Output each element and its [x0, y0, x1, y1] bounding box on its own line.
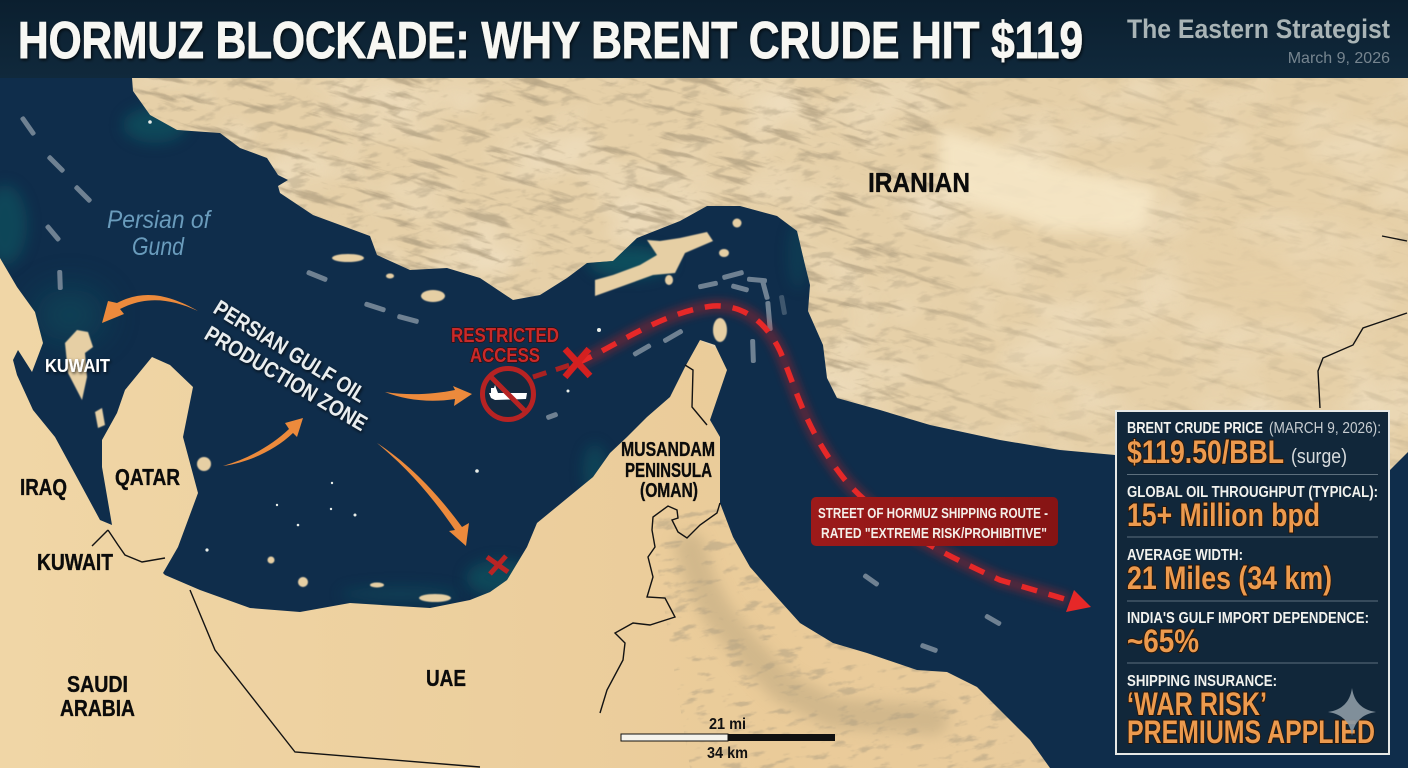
stat: global oil throughput: 15+ Million bpd [1127, 497, 1320, 533]
label: Iraq: IRAQ [20, 474, 67, 500]
stat: India's import dependence [1127, 610, 1369, 659]
arrow: from Qatar [223, 418, 303, 466]
label: Iranian: IRANIAN [868, 167, 970, 198]
label: Persian Gulf oil production zone: PERSIAN GULF OIL [209, 295, 371, 407]
label: Persian Gulf oil production zone: PRODUCTION ZONE [200, 321, 372, 436]
stat: average width [1127, 547, 1332, 596]
stat: Brent crude price: (MARCH 9, 2026): [1269, 420, 1381, 437]
map: Oman mountain terrain [654, 508, 1045, 768]
stat: average width: 21 Miles (34 km) [1127, 560, 1332, 596]
map: shallow teal water [0, 107, 808, 602]
map: Iranian terrain [132, 78, 1408, 470]
map: islands [65, 218, 742, 602]
label: UAE: UAE [426, 665, 466, 691]
stat: Brent crude price [1127, 420, 1381, 470]
label: Musandam Peninsula [621, 439, 715, 502]
panel: key statistics [1116, 411, 1389, 754]
icon: red cross on route [565, 349, 590, 377]
label: Kuwait black: KUWAIT [37, 549, 113, 575]
label: Musandam Peninsula: PENINSULA [625, 460, 712, 482]
stat: global oil throughput [1127, 484, 1378, 533]
route glow [577, 306, 1068, 600]
label: Kuwait white: KUWAIT [45, 356, 110, 376]
scale bar: 34 km [707, 745, 748, 762]
label: Musandam Peninsula: MUSANDAM [621, 439, 715, 461]
scale bar [621, 716, 835, 762]
label: Qatar: QATAR [115, 464, 180, 490]
label: Persian of Gund [107, 206, 213, 261]
icon: no ships [482, 368, 534, 420]
icon: sparkle watermark [1328, 688, 1376, 736]
label: Saudi Arabia [60, 671, 135, 721]
callout: shipping route rating: RATED "EXTREME RISK/PROHIBITIVE" [821, 525, 1047, 542]
stat: shipping insurance: ‘WAR RISK’ [1127, 686, 1267, 722]
label: Persian of Gund: Gund [132, 233, 185, 261]
stat: average width: AVERAGE WIDTH: [1127, 547, 1243, 564]
stat: Brent crude price: $119.50/BBL [1127, 434, 1284, 470]
arrow: toward coast [377, 443, 469, 546]
label: restricted access: RESTRICTED [451, 325, 559, 347]
stat: Brent crude price: BRENT CRUDE PRICE [1127, 420, 1263, 437]
date: March 9, 2026 [1288, 50, 1390, 67]
map: ships in the strait [20, 116, 1002, 653]
label: restricted access [451, 325, 559, 367]
stat: Brent crude price: (surge) [1291, 446, 1347, 468]
icon: small red cross on coast [487, 556, 508, 574]
map: country borders [92, 236, 1407, 767]
arrow: toward Kuwait [102, 295, 198, 323]
callout: shipping route rating: STREET OF HORMUZ SHIPPING ROUTE - [818, 505, 1048, 522]
scale bar: 21 mi [709, 716, 746, 733]
stat: India's import dependence: INDIA'S GULF IMPORT DEPENDENCE: [1127, 610, 1369, 627]
label: Saudi Arabia: SAUDI [67, 671, 128, 697]
arrow head: route end [1066, 590, 1091, 612]
label: Saudi Arabia: ARABIA [60, 695, 135, 721]
stat: shipping insurance [1127, 673, 1375, 750]
label: Musandam Peninsula: (OMAN) [640, 480, 698, 502]
publisher name: The Eastern Strategist [1127, 14, 1390, 44]
arrow: toward restricted access [385, 386, 472, 406]
stat: India's import dependence: ~65% [1127, 623, 1199, 659]
shipping route [533, 306, 1068, 600]
title: HORMUZ BLOCKADE: WHY BRENT CRUDE HIT $119 [18, 12, 1083, 70]
callout: shipping route rating [811, 497, 1058, 546]
header bar [0, 0, 1408, 78]
stat: shipping insurance: SHIPPING INSURANCE: [1127, 673, 1277, 690]
label: restricted access: ACCESS [470, 345, 540, 367]
label: Persian of Gund: Persian of [107, 206, 213, 234]
map: small white shoals [148, 120, 601, 552]
